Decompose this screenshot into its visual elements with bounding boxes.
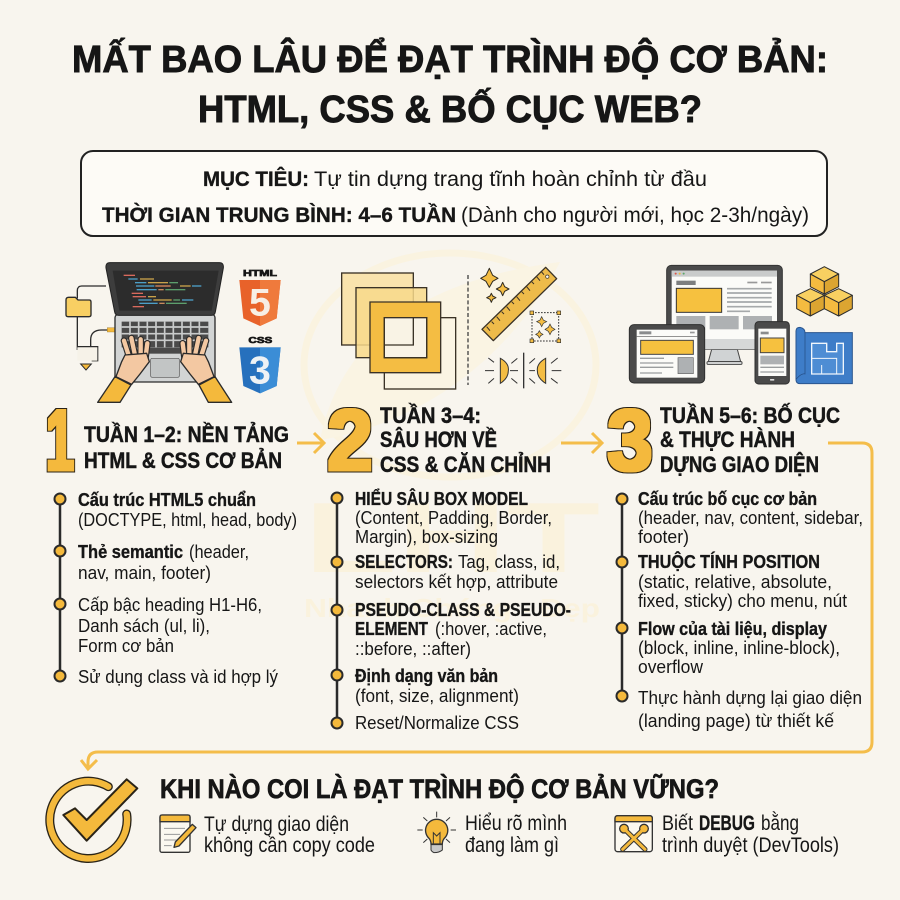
watermark: LHT	[304, 482, 600, 594]
column 2 bullet list: Reset/Normalize CSS	[355, 713, 519, 733]
step 1 heading: HTML & CSS CƠ BẢN	[84, 448, 282, 473]
step 2 heading: SÂU HƠN VỀ	[380, 427, 497, 452]
icon: browser window with tools	[615, 816, 652, 852]
column 3 bullet list: overflow	[638, 657, 704, 677]
tablet	[629, 325, 705, 383]
icon: light bulb	[417, 812, 456, 853]
column 2 bullet list: (Content, Padding, Border,	[355, 508, 552, 528]
column 2 bullet list: SELECTORS:	[355, 552, 453, 572]
column 1 bullet list: Danh sách (ul, li),	[78, 616, 210, 636]
step 2 heading	[327, 393, 551, 489]
icon: document and pencil	[160, 815, 196, 852]
step 3 heading	[607, 393, 840, 489]
number 1: 1	[46, 393, 74, 489]
cubes	[797, 267, 852, 316]
column 2 bullet list: Tag, class, id,	[458, 552, 560, 572]
criterion: debug with DevTools	[615, 812, 839, 857]
CSS3 logo	[239, 335, 281, 393]
step 1 heading	[46, 393, 289, 489]
number 3: 3	[607, 393, 653, 489]
column 3 bullet list	[616, 489, 863, 731]
title: MẤT BAO LÂU ĐỂ ĐẠT TRÌNH ĐỘ CƠ BẢN:	[72, 36, 828, 81]
icon: box model squares and ruler	[342, 267, 561, 389]
column 3 bullet list: Cấu trúc bố cục cơ bản	[638, 489, 817, 509]
criterion: build without copying: Tự dựng giao diện	[204, 813, 349, 836]
step 3 heading: & THỰC HÀNH	[660, 427, 795, 452]
column 2 bullet list: Margin), box-sizing	[355, 527, 498, 547]
criterion: debug with DevTools: Biết	[662, 812, 693, 835]
desktop monitor	[667, 265, 782, 364]
icon: laptop with HTML and CSS logos	[66, 263, 281, 402]
icon: large check mark in ring	[50, 779, 137, 858]
dashed divider	[466, 275, 470, 385]
column 1 bullet list: Sử dụng class và id hợp lý	[78, 667, 278, 687]
column 3 bullet list: THUỘC TÍNH POSITION	[638, 551, 820, 572]
criterion: debug with DevTools: bằng	[761, 812, 799, 835]
column 1 bullet list	[54, 490, 297, 687]
watermark	[304, 253, 600, 623]
watermark: Nhanh Chóng - Đẹp	[304, 593, 600, 623]
arrow: step 2 to step 3	[561, 433, 602, 453]
column 2 bullet list: ELEMENT	[355, 619, 428, 639]
blueprint	[796, 327, 852, 384]
criterion: debug with DevTools: trình duyệt (DevTools)	[662, 834, 839, 857]
phone	[755, 322, 789, 384]
column 3 bullet list: Thực hành dựng lại giao diện	[638, 688, 862, 708]
ruler	[482, 267, 557, 341]
goal box	[81, 151, 827, 236]
column 1 bullet list: Cấu trúc HTML5 chuẩn	[78, 490, 256, 510]
title	[72, 36, 828, 131]
arrow: connector from step 3 to checkpoint	[81, 443, 872, 769]
column 2 bullet list: (font, size, alignment)	[355, 686, 519, 706]
column 1 bullet list: (DOCTYPE, html, head, body)	[78, 510, 297, 530]
column 1 bullet list: Cấp bậc heading H1-H6,	[78, 595, 262, 615]
sparkles	[481, 268, 509, 302]
step 2 heading: CSS & CĂN CHỈNH	[380, 452, 551, 477]
number 2: 2	[327, 393, 373, 489]
column 2 bullet list: (:hover, :active,	[435, 619, 547, 639]
selection box	[530, 311, 561, 343]
HTML5 logo: HTML	[243, 268, 278, 278]
HTML5 logo	[239, 268, 281, 326]
column 1 bullet list: Form cơ bản	[78, 636, 174, 656]
overlapping squares	[342, 273, 456, 389]
column 3 bullet list: Flow của tài liệu, display	[638, 619, 827, 639]
column 3 bullet list: fixed, sticky) cho menu, nút	[638, 591, 847, 611]
step 1 heading: TUẦN 1–2: NỀN TẢNG	[84, 422, 289, 447]
criterion: build without copying: không cần copy code	[204, 834, 375, 857]
criterion: understand what you do	[417, 812, 567, 857]
left hand	[98, 338, 149, 402]
goal box: Tự tin dựng trang tĩnh hoàn chỉnh từ đầu	[314, 168, 707, 191]
arrow: step 1 to step 2	[297, 433, 324, 453]
goal box: THỜI GIAN TRUNG BÌNH: 4–6 TUẦN	[102, 203, 456, 227]
CSS3 logo: CSS	[248, 335, 273, 345]
criterion: understand what you do: đang làm gì	[465, 834, 559, 857]
column 2 bullet list: HIỂU SÂU BOX MODEL	[355, 488, 528, 509]
HTML5 logo: 5	[249, 281, 271, 325]
criterion: understand what you do: Hiểu rõ mình	[465, 812, 567, 835]
folder and cables	[66, 286, 115, 370]
column 2 bullet list: ::before, ::after)	[355, 639, 471, 659]
column 2 bullet list	[332, 488, 571, 733]
goal box: MỤC TIÊU:	[203, 167, 309, 191]
icon: responsive devices and blueprint	[629, 265, 852, 384]
column 2 bullet list: Định dạng văn bản	[355, 666, 498, 686]
column 1 bullet list: nav, main, footer)	[78, 563, 211, 583]
column 2 bullet list: PSEUDO-CLASS & PSEUDO-	[355, 600, 571, 620]
step 2 heading: TUẦN 3–4:	[380, 403, 481, 428]
column 1 bullet list: Thẻ semantic	[78, 542, 183, 562]
CSS3 logo: 3	[249, 348, 271, 392]
criterion: debug with DevTools: DEBUG	[699, 812, 755, 835]
column 3 bullet list: (header, nav, content, sidebar,	[638, 508, 863, 528]
step 3 heading: TUẦN 5–6: BỐ CỤC	[660, 402, 840, 428]
right hand	[181, 338, 232, 402]
column 3 bullet list: (static, relative, absolute,	[638, 572, 832, 592]
column 3 bullet list: (block, inline, inline-block),	[638, 638, 840, 658]
laptop	[106, 263, 223, 382]
bottom heading: KHI NÀO COI LÀ ĐẠT TRÌNH ĐỘ CƠ BẢN VỮNG?	[160, 772, 719, 804]
alignment symbols	[485, 353, 561, 388]
column 3 bullet list: (landing page) từ thiết kế	[638, 711, 834, 731]
goal box: (Dành cho người mới, học 2-3h/ngày)	[461, 204, 809, 227]
column 2 bullet list: selectors kết hợp, attribute	[355, 572, 558, 592]
criterion: build without copying	[160, 813, 375, 857]
column 1 bullet list: (header,	[189, 542, 249, 562]
step 3 heading: DỰNG GIAO DIỆN	[660, 452, 819, 477]
column 3 bullet list: footer)	[638, 527, 689, 547]
title: HTML, CSS & BỐ CỤC WEB?	[198, 86, 702, 131]
